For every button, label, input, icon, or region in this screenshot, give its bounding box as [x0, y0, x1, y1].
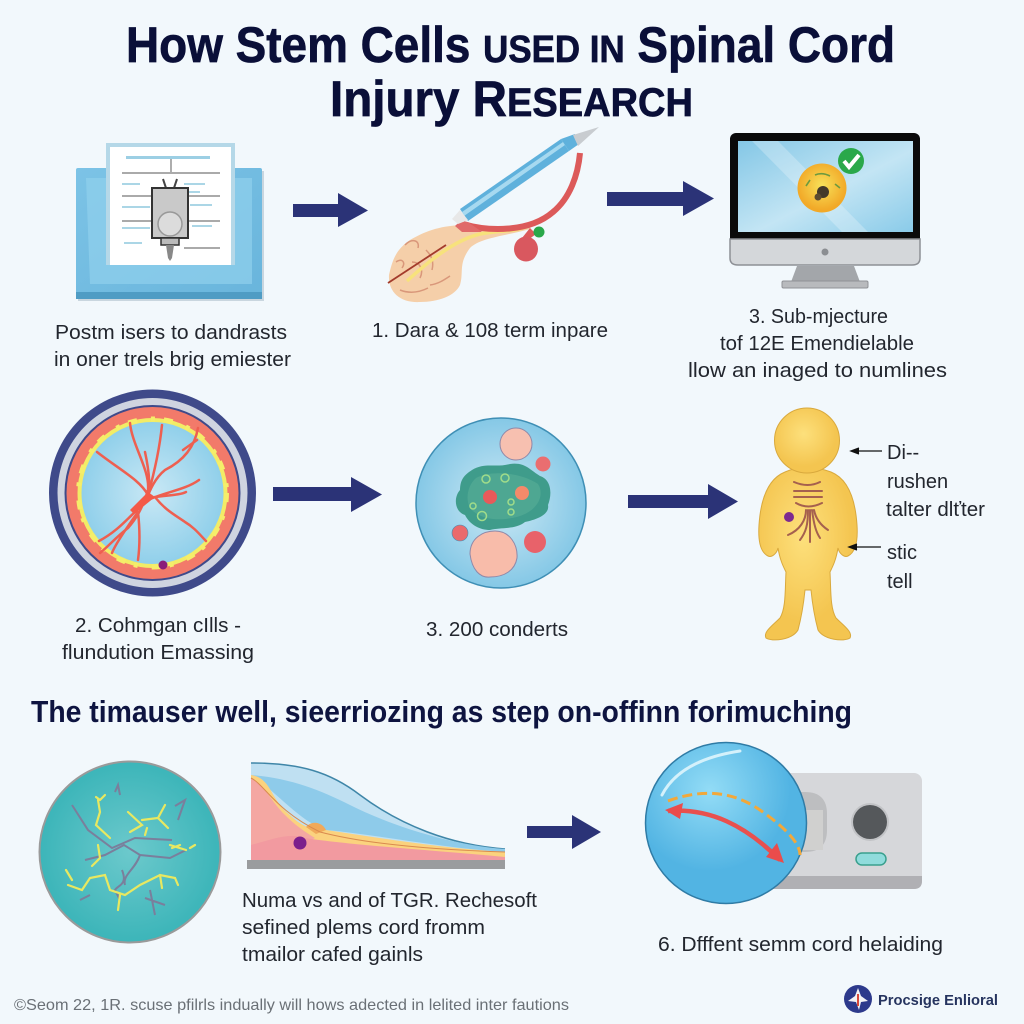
panel: teal neural network circle [40, 762, 220, 942]
callout arrows and labels: talter dlťter [886, 499, 985, 521]
caption: tissue diagram: Numa vs and of TGR. Rechesoft [242, 890, 537, 912]
caption: monitor: 3. Sub-mjecture [749, 306, 888, 328]
caption: monitor: llow an inaged to numlines [688, 360, 947, 382]
title: How Stem Cells USED IN Spinal Cord [126, 17, 895, 73]
panel: spinal cross-section circle [49, 390, 256, 596]
callout arrows and labels [849, 442, 985, 593]
logo: Procsige Enlioral [878, 993, 998, 1009]
caption: tissue diagram: sefined plems cord fromm [242, 917, 485, 939]
caption: tissue diagram [242, 890, 537, 966]
tissue [389, 222, 532, 302]
section heading: The timauser well, sieerriozing as step on-offinn forimuching [31, 694, 852, 729]
panel: sphere and device [646, 742, 922, 904]
device knob [851, 803, 889, 841]
callout arrows and labels: rushen [887, 471, 948, 493]
panel: monitor icon [730, 133, 920, 288]
panel: needle injecting spinal tissue [388, 127, 599, 302]
logo [844, 985, 998, 1013]
caption: monitor: tof 12E Emendielable [720, 333, 914, 355]
icon: emoji orb [798, 164, 846, 212]
red tube [463, 153, 580, 229]
caption: monitor [688, 306, 947, 382]
arrow 3 [273, 477, 382, 512]
caption: needle: 1. Dara & 108 term inpare [372, 320, 608, 342]
arrow 2 [607, 181, 714, 216]
internal spine and nerves [788, 482, 828, 542]
panel: document folder icon [76, 143, 264, 301]
icon: green check badge [838, 148, 864, 174]
icon: grey syringe device [152, 179, 188, 261]
needle body [460, 139, 569, 221]
caption: folder [54, 322, 291, 371]
caption: cross-section [62, 615, 254, 664]
caption: cells: 3. 200 conderts [426, 619, 568, 641]
footer note: ©Seom 22, 1R. scuse pfilrls indually will hows adected in lelited inter fautions [14, 997, 569, 1014]
caption: cross-section: flundution Emassing [62, 642, 254, 664]
caption: folder: Postm isers to dandrasts [55, 322, 287, 344]
caption: sphere: 6. Dfffent semm cord helaiding [658, 934, 943, 956]
caption: tissue diagram: tmailor cafed gainls [242, 944, 423, 966]
callout arrows and labels: stic [887, 542, 917, 564]
caption: folder: in oner trels brig emiester [54, 349, 291, 371]
panel: human figure [759, 408, 857, 640]
green cell mass [456, 464, 550, 530]
arrow 1 [293, 193, 368, 227]
panel: layered spinal tissue diagram [247, 763, 505, 869]
title [126, 17, 895, 127]
red double arrow [665, 803, 784, 863]
red branching vessels [97, 423, 206, 560]
title: Injury RESEARCH [330, 71, 693, 127]
panel: cell cluster circle [416, 418, 586, 588]
arrow 4 [628, 484, 738, 519]
arrow 5 [527, 815, 601, 849]
caption: cross-section: 2. Cohmgan cIlls - [75, 615, 241, 637]
callout arrows and labels: tell [887, 571, 913, 593]
callout arrows and labels: Di-- [887, 442, 919, 464]
